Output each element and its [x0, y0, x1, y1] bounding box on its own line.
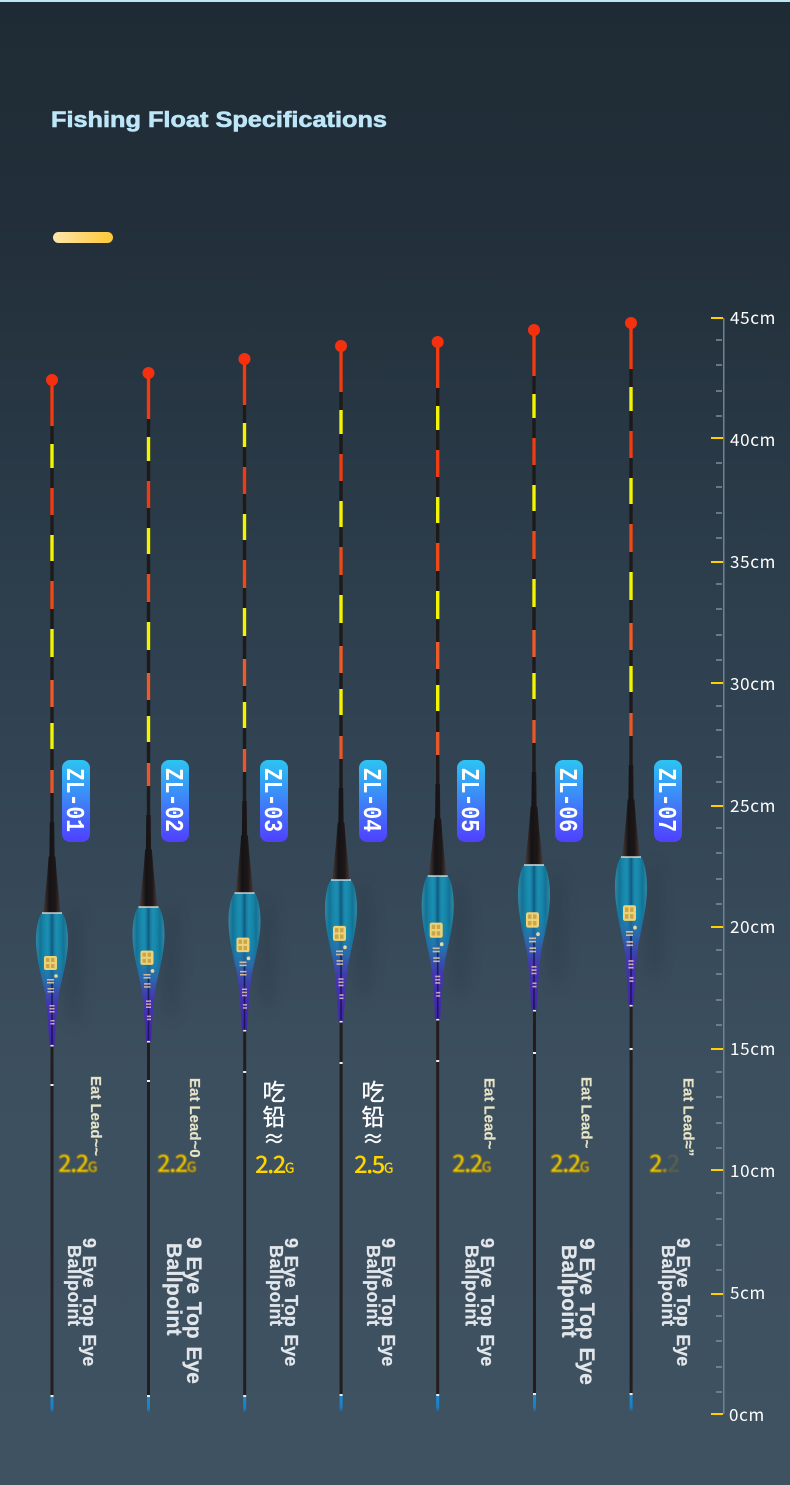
description ZL-06: 9 Eye Top Eye — [575, 1238, 598, 1385]
lead label ZL-04: ≈ — [362, 1122, 384, 1154]
ruler: 40cm — [730, 426, 776, 451]
lead label ZL-03: 吃 — [262, 1079, 286, 1105]
lead value ZL-01: 2.2G — [58, 1144, 98, 1179]
float ZL-07 — [615, 317, 663, 1412]
float ZL-03 — [228, 353, 276, 1413]
ruler: 15cm — [730, 1035, 776, 1060]
description ZL-01 — [64, 1238, 99, 1366]
lead label ZL-03 — [262, 1079, 286, 1154]
badge ZL-02: ZL-02 — [158, 768, 188, 832]
description ZL-03: 9 Eye Top Eye — [281, 1238, 301, 1366]
ruler: 0cm — [729, 1401, 765, 1426]
accent pill — [53, 232, 113, 243]
lead label ZL-01: Eat Lead~~ — [87, 1076, 104, 1156]
description ZL-07: Ballpoint — [658, 1245, 678, 1326]
description ZL-06 — [557, 1238, 598, 1385]
badge ZL-06: ZL-06 — [552, 768, 582, 832]
description ZL-05: 9 Eye Top Eye — [477, 1238, 497, 1366]
ruler: 10cm — [730, 1157, 776, 1182]
badge ZL-05: ZL-05 — [454, 768, 484, 832]
description ZL-03: Ballpoint — [266, 1245, 286, 1326]
ruler: 45cm — [730, 304, 776, 329]
description ZL-01: 9 Eye Top Eye — [79, 1238, 99, 1366]
float ZL-01 — [36, 374, 83, 1413]
description ZL-04 — [363, 1238, 398, 1366]
lead label ZL-04 — [362, 1079, 384, 1154]
description ZL-05 — [462, 1238, 497, 1366]
badge ZL-01: ZL-01 — [59, 768, 89, 832]
top edge line — [0, 0, 790, 2]
lead label ZL-03: 铅 — [262, 1104, 286, 1130]
lead label ZL-03: ≈ — [263, 1122, 285, 1154]
description ZL-02 — [162, 1237, 205, 1384]
description ZL-07: 9 Eye Top Eye — [673, 1238, 693, 1366]
float ZL-02 — [132, 367, 180, 1413]
badge ZL-07: ZL-07 — [651, 768, 681, 832]
ruler: 35cm — [730, 548, 776, 573]
float ZL-06 — [518, 324, 566, 1412]
lead value ZL-06: 2.2G — [550, 1144, 590, 1179]
description ZL-04: 9 Eye Top Eye — [378, 1238, 398, 1366]
lead label ZL-06: Eat Lead~ — [578, 1077, 594, 1149]
lead label ZL-02: Eat Lead~0 — [186, 1078, 203, 1158]
lead label ZL-05: Eat Lead~ — [480, 1078, 498, 1150]
float ZL-05 — [422, 336, 469, 1412]
lead label ZL-07: Eat Lead≈” — [680, 1078, 696, 1156]
ruler — [711, 304, 776, 1426]
title: Fishing Float Specifications — [51, 107, 387, 132]
lead value ZL-04: 2.5G — [354, 1145, 394, 1180]
ruler: 5cm — [730, 1279, 766, 1304]
lead label ZL-04: 吃 — [362, 1079, 384, 1105]
ruler: 25cm — [730, 792, 776, 817]
description ZL-02: Ballpoint — [162, 1243, 185, 1336]
description ZL-04: Ballpoint — [363, 1245, 383, 1326]
lead value ZL-02: 2.2G — [157, 1144, 197, 1179]
ruler: 30cm — [730, 670, 776, 695]
lead value ZL-07: 2.2 — [649, 1144, 680, 1179]
lead value ZL-05: 2.2G — [452, 1144, 492, 1179]
float ZL-04 — [325, 340, 373, 1412]
description ZL-05: Ballpoint — [462, 1245, 482, 1326]
description ZL-06: Ballpoint — [557, 1245, 580, 1338]
lead value ZL-03: 2.2G — [255, 1145, 295, 1180]
description ZL-02: 9 Eye Top Eye — [182, 1237, 205, 1384]
description ZL-01: Ballpoint — [64, 1245, 84, 1326]
badge ZL-04: ZL-04 — [356, 768, 386, 832]
lead label ZL-04: 铅 — [362, 1104, 384, 1130]
description ZL-07 — [658, 1238, 693, 1366]
description ZL-03 — [266, 1238, 301, 1366]
badge ZL-03: ZL-03 — [257, 768, 287, 832]
ruler: 20cm — [730, 913, 776, 938]
